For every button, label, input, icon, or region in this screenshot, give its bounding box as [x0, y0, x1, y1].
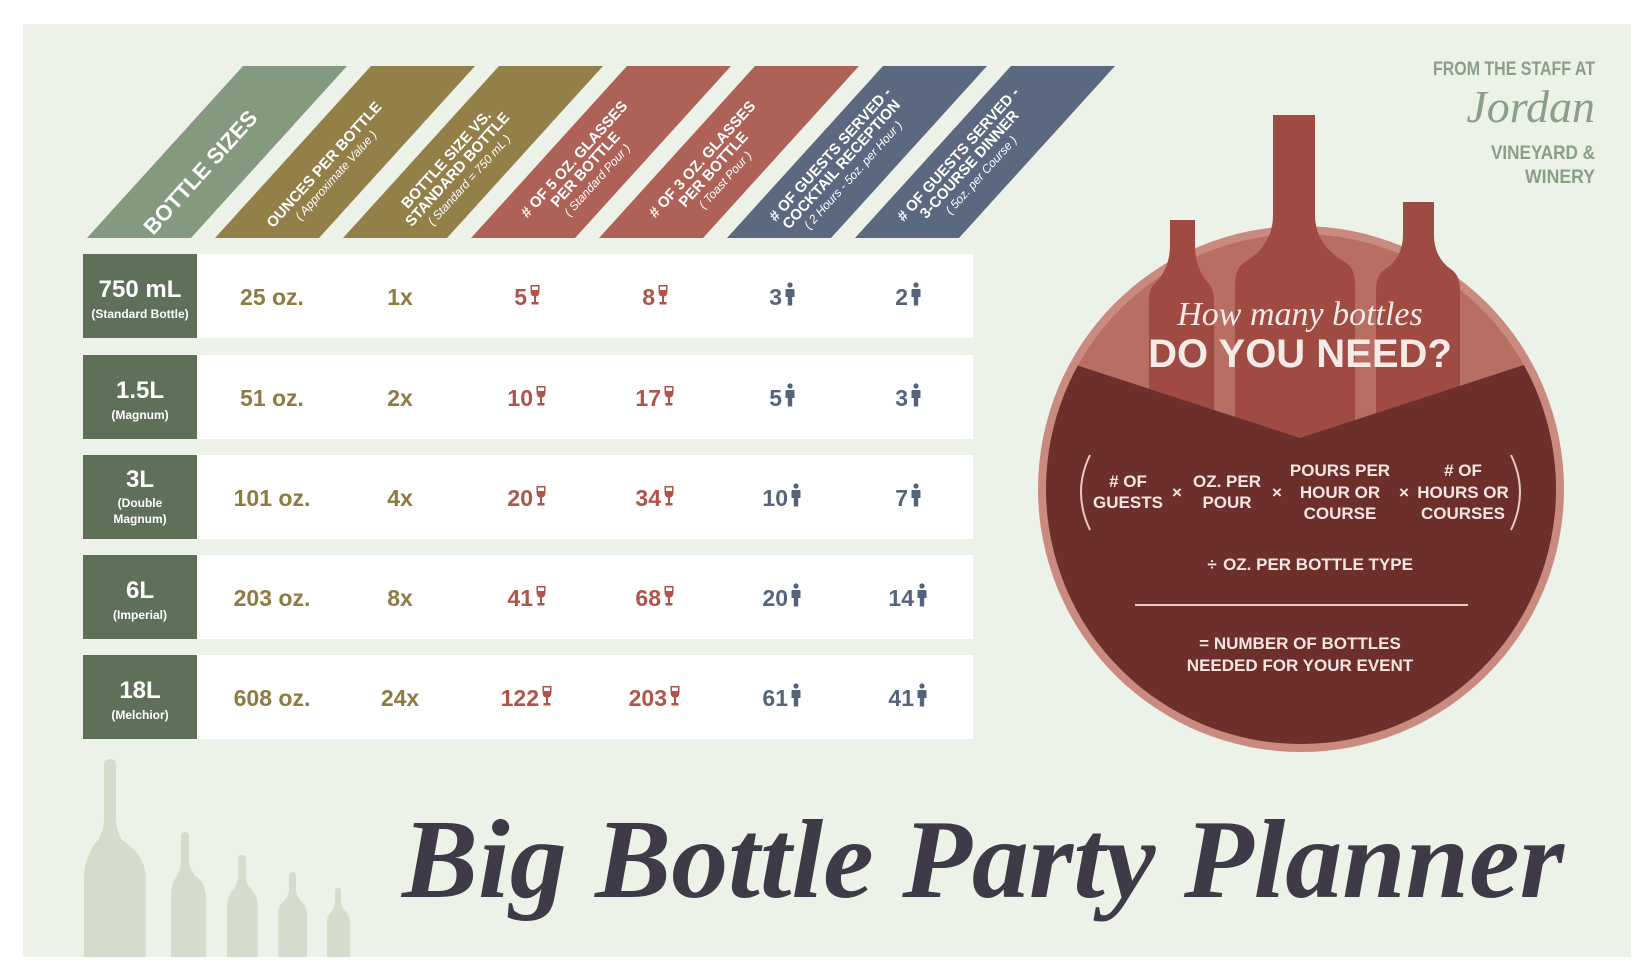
formula: ÷ [1207, 555, 1217, 574]
row: 6 L: 14 [888, 585, 914, 611]
header: 5 oz glasses: PER BOTTLE [548, 129, 624, 211]
row: 1.5 L: 17 [635, 385, 661, 411]
row: 750 mL [83, 254, 973, 338]
header: 5 oz glasses [471, 66, 731, 241]
header: 3 oz glasses: PER BOTTLE [676, 129, 752, 211]
formula: HOURS OR [1417, 483, 1509, 502]
header: guests dinner: # OF GUESTS SERVED - [894, 84, 1023, 225]
calculator circle: DO YOU NEED? [1148, 332, 1452, 376]
row: 750 mL: 25 oz. [240, 284, 304, 310]
calculator circle [1030, 115, 1570, 760]
row: 18 L: 24x [381, 685, 419, 711]
header: 5 oz glasses: # OF 5 OZ. GLASSES [518, 98, 631, 221]
formula: # OF [1109, 472, 1147, 491]
header: guests dinner: ( 5oz. per Course ) [942, 133, 1020, 217]
row: 6 L: 20 [762, 585, 788, 611]
row: 1.5 L: 10 [507, 385, 533, 411]
row: 18 L: 41 [888, 685, 914, 711]
formula: POURS PER [1290, 461, 1390, 480]
row: 6 L: 68 [635, 585, 661, 611]
row: 1.5 L: 1.5L [116, 377, 164, 404]
formula [1081, 455, 1520, 675]
formula: COURSE [1304, 504, 1376, 523]
header: bottle sizes [87, 66, 347, 239]
brand: Jordan [1433, 59, 1595, 188]
row: 750 mL: (Standard Bottle) [91, 307, 189, 321]
header: ounces per bottle [215, 66, 475, 241]
formula: GUESTS [1093, 493, 1163, 512]
row: 750 mL: 8 [642, 284, 655, 310]
header: guests cocktail: # OF GUESTS SERVED - [766, 84, 895, 225]
row: 18 L: 608 oz. [234, 685, 310, 711]
formula: × [1399, 483, 1409, 502]
brand: Jordan: FROM THE STAFF AT [1433, 59, 1595, 80]
formula: × [1272, 483, 1282, 502]
brand: Jordan: WINERY [1525, 167, 1595, 188]
header: ounces per bottle: ( Approximate Value ) [292, 128, 380, 223]
formula: # OF [1444, 461, 1482, 480]
row: 1.5 L: 2x [387, 385, 413, 411]
row: 18 L: 203 [629, 685, 667, 711]
row: 3 L: (Double [118, 496, 163, 510]
row: 750 mL: 5 [514, 284, 527, 310]
row: 6 L: 6L [126, 577, 154, 604]
row: 3 L: 3L [126, 466, 154, 493]
header: bottle size vs standard [343, 66, 603, 239]
decorative bottles bottom-left [84, 759, 350, 957]
formula: × [1172, 483, 1182, 502]
table rows [83, 254, 973, 739]
row: 18 L: (Melchior) [111, 708, 169, 722]
row: 6 L: 41 [507, 585, 533, 611]
header: bottle size vs standard: ( Standard = 750 mL ) [425, 132, 513, 228]
formula: NEEDED FOR YOUR EVENT [1187, 656, 1414, 675]
row: 3 L: 34 [635, 485, 661, 511]
row: 18 L: 18L [119, 677, 161, 704]
row: 6 L: 8x [387, 585, 413, 611]
row: 1.5 L: (Magnum) [111, 408, 169, 422]
formula: = NUMBER OF BOTTLES [1199, 634, 1401, 653]
row: 1.5 L: 51 oz. [240, 385, 304, 411]
header: column headers [87, 66, 1115, 244]
row: 3 L: 7 [895, 485, 908, 511]
row: 6 L [83, 555, 973, 639]
icon: three bottles [1149, 115, 1460, 480]
row: 3 L [83, 455, 973, 539]
row: 6 L: 203 oz. [234, 585, 310, 611]
formula: HOUR OR [1300, 483, 1380, 502]
row: 3 L: 10 [762, 485, 788, 511]
formula: COURSES [1421, 504, 1505, 523]
formula: POUR [1202, 493, 1252, 512]
header: guests dinner [855, 66, 1115, 244]
header: 3 oz glasses: # OF 3 OZ. GLASSES [646, 98, 759, 221]
row: 3 L: 4x [387, 485, 413, 511]
header: guests dinner: 3-COURSE DINNER [917, 107, 1023, 222]
header: ounces per bottle: OUNCES PER BOTTLE [263, 99, 385, 231]
formula: OZ. PER [1193, 472, 1261, 491]
dark lower region [1046, 365, 1556, 744]
header: guests cocktail: COCKTAIL RECEPTION [779, 97, 904, 233]
row: 1.5 L: 3 [895, 385, 908, 411]
header: 5 oz glasses: ( Standard Pour ) [561, 141, 633, 219]
header: bottle size vs standard: STANDARD BOTTLE [402, 109, 513, 230]
row: 750 mL: 750 mL [99, 276, 181, 303]
row: 18 L [83, 655, 973, 739]
formula: OZ. PER BOTTLE TYPE [1223, 555, 1413, 574]
row: 3 L: 101 oz. [234, 485, 310, 511]
row: 750 mL: 1x [387, 284, 413, 310]
circle heading: How many bottles [1176, 296, 1423, 333]
row: 18 L: 61 [762, 685, 788, 711]
row: 6 L: (Imperial) [113, 608, 167, 622]
header: 3 oz glasses [599, 66, 859, 241]
row: 750 mL: 3 [769, 284, 782, 310]
header: guests cocktail [727, 66, 987, 244]
header: bottle sizes: BOTTLE SIZES [138, 105, 262, 239]
title: Big Bottle Party Planner [400, 798, 1565, 922]
brand: Jordan: VINEYARD & [1491, 143, 1595, 164]
row: 750 mL: 2 [895, 284, 908, 310]
header: 3 oz glasses: ( Toast Pour ) [696, 149, 755, 212]
row: 18 L: 122 [501, 685, 539, 711]
row: 3 L: 20 [507, 485, 533, 511]
header: guests cocktail: ( 2 Hours - 5oz. per Hour ) [801, 118, 905, 232]
row: 1.5 L [83, 355, 973, 439]
header: bottle size vs standard: BOTTLE SIZE VS. [398, 107, 495, 212]
brand: Jordan: Jordan [1466, 81, 1595, 132]
row: 3 L: Magnum) [113, 512, 167, 526]
row: 1.5 L: 5 [769, 385, 782, 411]
